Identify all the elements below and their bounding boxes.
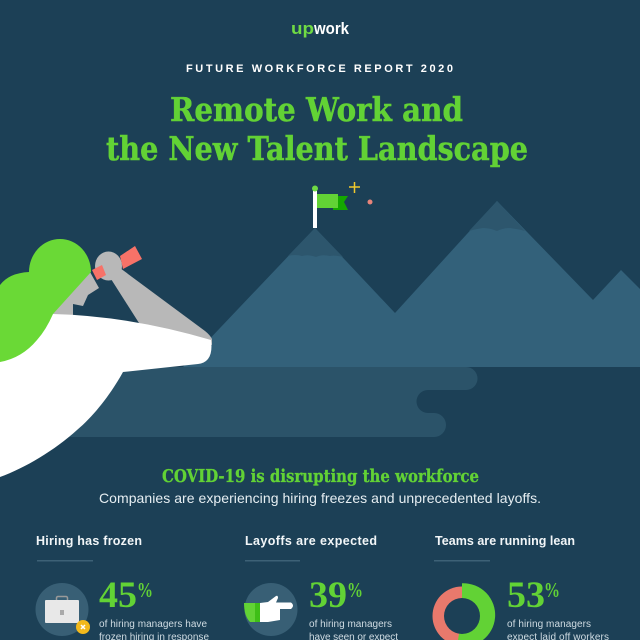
snowcap right [469, 201, 525, 231]
description [99, 619, 209, 640]
sparkle: dot [368, 200, 372, 204]
illustration: flag [312, 186, 348, 228]
report label: FUTURE WORKFORCE REPORT 2020 [186, 63, 453, 75]
illustration: person with telescope [0, 239, 212, 477]
column: hiring has frozen [36, 534, 209, 640]
logo: Upwork: work [313, 19, 349, 38]
logo: Upwork: up [291, 19, 314, 38]
section subheading: Companies are experiencing hiring freezes and unprecedented layoffs. [99, 490, 541, 506]
stat: 39%: 39 [309, 575, 347, 616]
column heading: Layoffs are expected [245, 534, 377, 548]
stat: 45% [99, 575, 153, 616]
sparkle: plus [349, 182, 360, 193]
description: of hiring managers have [99, 619, 207, 630]
donut chart [432, 583, 495, 640]
icon: briefcase [36, 583, 90, 636]
description: of hiring managers [309, 619, 392, 630]
description [507, 619, 609, 640]
face [50, 272, 99, 316]
stat: 39%: % [347, 578, 363, 602]
title: the New Talent Landscape [106, 129, 528, 168]
telescope far [120, 246, 142, 269]
description [309, 619, 398, 640]
column: teams are running lean [432, 534, 609, 640]
logo: Upwork [291, 19, 349, 38]
column: layoffs are expected [244, 534, 398, 640]
column heading: Teams are running lean [435, 534, 575, 548]
stat: 53%: 53 [507, 575, 545, 616]
title: Remote Work and [170, 90, 463, 129]
telescope near [92, 265, 106, 280]
hair [0, 239, 91, 362]
title [106, 90, 528, 168]
snowcap left [288, 228, 343, 257]
stat: 45%: % [137, 578, 153, 602]
column heading: Hiring has frozen [36, 534, 142, 548]
hand [95, 252, 122, 280]
illustration: mountains [183, 201, 640, 367]
arm [111, 268, 212, 345]
stat: 39% [309, 575, 363, 616]
illustration: lake [60, 367, 478, 437]
stat: 53% [507, 575, 560, 616]
description: of hiring managers [507, 619, 591, 630]
icon: pointing hand [244, 583, 298, 636]
stat: 45%: 45 [99, 575, 137, 616]
stat: 53%: % [544, 578, 560, 602]
section heading: COVID-19 is disrupting the workforce [162, 466, 479, 487]
body [0, 314, 211, 477]
